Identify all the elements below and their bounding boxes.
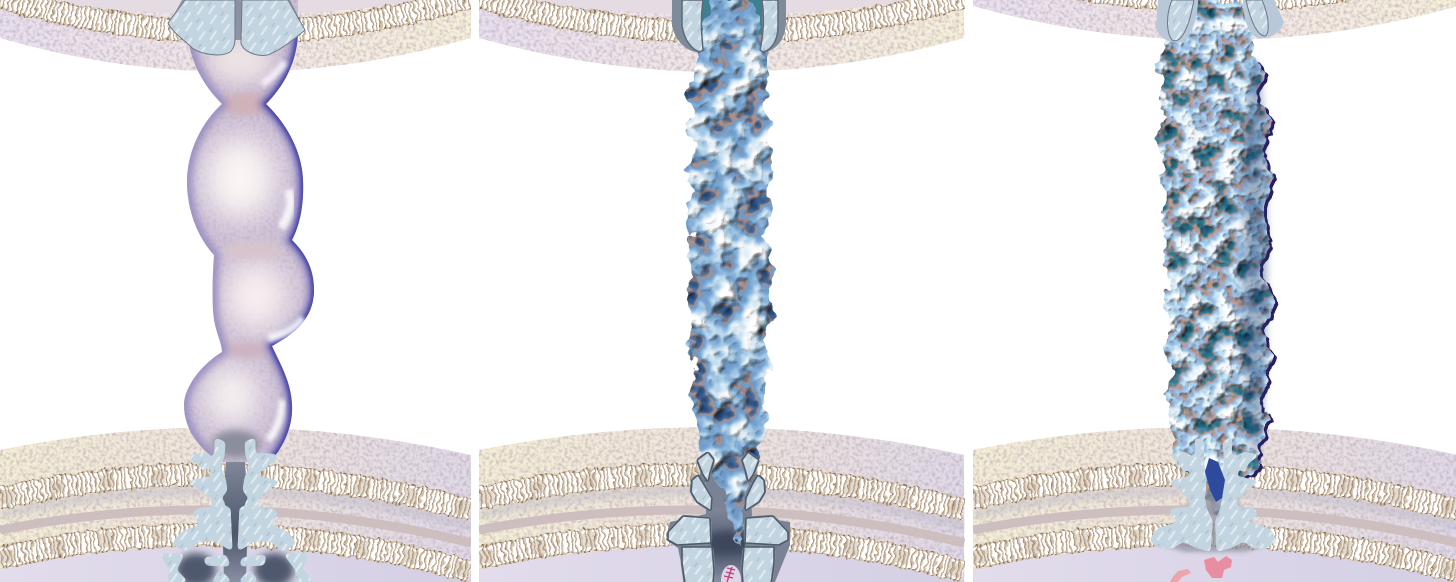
panel: stage two, bumpy blue tube — [479, 0, 964, 582]
top membrane — [973, 0, 1456, 40]
top pore protein — [1156, 0, 1284, 42]
top pore protein — [168, 0, 305, 55]
bottom membrane — [479, 427, 964, 582]
bottom membrane — [0, 427, 471, 582]
tube dark rim — [1244, 62, 1278, 478]
top membrane — [0, 0, 471, 72]
spiky tube surface — [1154, 0, 1274, 520]
pink cargo molecules — [1170, 556, 1232, 582]
bottom pore protein — [668, 452, 788, 582]
bottom pore protein — [160, 438, 314, 582]
bulbous smooth tube — [184, 0, 314, 462]
bumpy tube surface — [684, 0, 774, 546]
pink thread — [724, 567, 735, 582]
top pore fingers — [682, 0, 778, 52]
top membrane — [479, 0, 964, 72]
bottom membrane — [973, 427, 1456, 582]
top pore cap — [672, 0, 786, 52]
bottom pore protein — [1150, 437, 1276, 552]
panel: stage one, smooth bulging tube — [0, 0, 471, 582]
bottom pore dark channel — [666, 470, 790, 582]
tube tip in channel — [1205, 458, 1225, 502]
panel: stage three, spiky tube with cargo — [973, 0, 1456, 582]
